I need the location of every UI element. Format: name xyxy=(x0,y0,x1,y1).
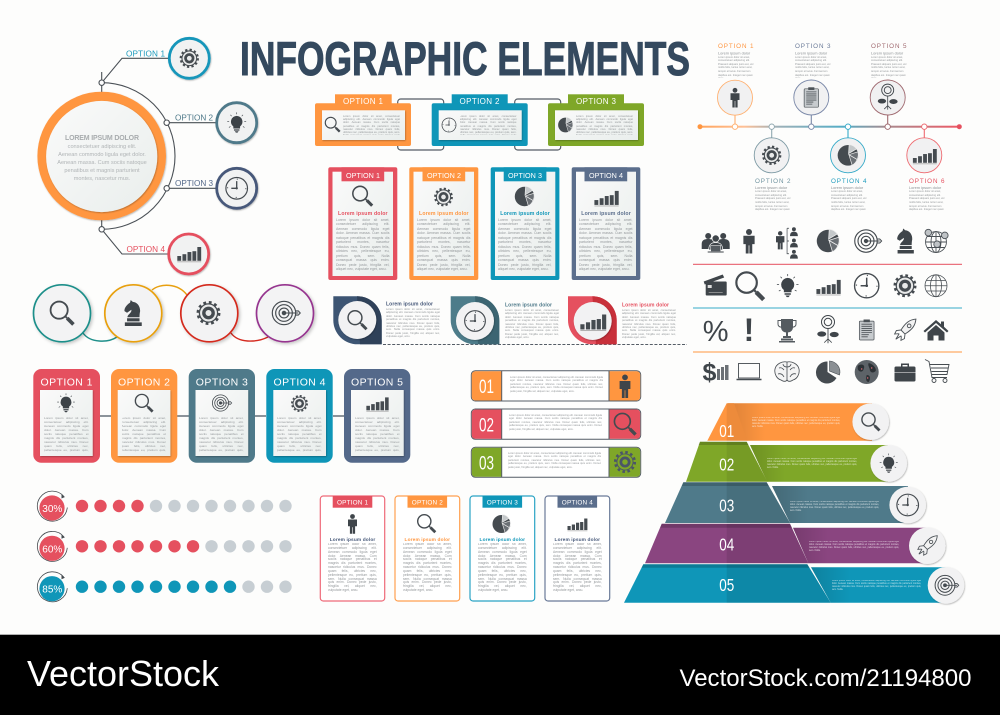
box option 2: OPTION 2 xyxy=(460,97,500,106)
process option 1: OPTION 1 xyxy=(40,376,93,388)
card option 1: Lorem ipsum dolor sit amet, consectetuer adipiscing elit. Aenean commodo ligula eget dolor. Aenean massa. Cum sociis natoque penatibus et magnis dis parturient montes, nascetur ridiculus mus. Donec quam felis, ultricies nec, pellentesque eu, pretium quis, sem. Nulla consequat massa quis enim. Donec pede justo, fringilla vel, aliquet nec, vulputate eget, arcu. xyxy=(336,218,390,271)
box option 1 xyxy=(315,94,411,146)
layer 02: 02 xyxy=(719,454,734,474)
step 3: OPTION 3 xyxy=(795,43,831,50)
card option 4 xyxy=(572,167,640,280)
note 1: Lorem ipsum dolor sit amet, consectetuer adipiscing elit. Aenean commodo ligula eget dolor. Aenean massa. Cum sociis natoque penatibus et magnis dis parturient montes, nascetur ridiculus mus. Donec quam felis, ultricies nec, pellentesque eu, pretium quis, sem. Nulla consequat massa quis enim. Donec pede justo, fringilla vel, aliquet nec, vulputate eget, arcu. xyxy=(386,308,440,338)
option 2: OPTION 2 xyxy=(175,114,213,122)
connector outlines xyxy=(398,99,561,150)
bar 02 xyxy=(471,409,641,439)
note 3: Lorem ipsum dolor sit amet, consectetuer adipiscing elit. Aenean commodo ligula eget dolor. Aenean massa. Cum sociis natoque penatibus et magnis dis parturient montes, nascetur ridiculus mus. Donec quam felis, ultricies nec, pellentesque eu, pretium quis, sem. Nulla consequat massa quis enim. Donec pede justo, fringilla vel, aliquet nec, vulputate eget, arcu. xyxy=(622,309,676,339)
step 6: OPTION 6 xyxy=(909,178,945,185)
progress 60% xyxy=(37,531,292,561)
icon row 3: % xyxy=(703,316,729,348)
card option 3 xyxy=(491,167,559,280)
circle: knight xyxy=(105,285,162,342)
step 4: OPTION 4 xyxy=(831,178,867,185)
progress 85%: 85% xyxy=(42,585,62,596)
dividers xyxy=(693,264,962,352)
layer 01: 01 xyxy=(719,421,734,441)
step 3: Lorem ipsum dolor xyxy=(795,50,828,55)
option 2 xyxy=(175,103,257,143)
outlined card 1 xyxy=(320,496,385,601)
card option 2 xyxy=(409,167,478,280)
layer 02 xyxy=(686,442,907,482)
layer 05: Lorem ipsum dolor sit amet, consectetuer adipiscing elit. Aenean commodo ligula eget dolor. Aenean massa. Cum sociis natoque penatibus et magnis dis parturient montes, nascetur ridiculus mus. Donec quam felis, ultricies nec, pellentesque eu, pretium quis, sem. Nulla. xyxy=(832,580,921,590)
outlined card 4: Lorem ipsum dolor xyxy=(555,537,600,543)
note 2: Lorem ipsum dolor sit amet, consectetuer adipiscing elit. Aenean commodo ligula eget dolor. Aenean massa. Cum sociis natoque penatibus et magnis dis parturient montes, nascetur ridiculus mus. Donec quam felis, ultricies nec, pellentesque eu, pretium quis, sem. Nulla consequat massa quis enim. Donec pede justo, fringilla vel, aliquet nec, vulputate eget, arcu. xyxy=(505,309,559,339)
process option 3: OPTION 3 xyxy=(196,376,248,388)
step 1 xyxy=(718,43,754,129)
step 4 xyxy=(830,124,867,212)
outlined card 4 xyxy=(545,496,610,601)
step 4: Lorem ipsum dolor xyxy=(831,185,864,190)
icon row 3: ! xyxy=(744,312,754,348)
process option 4 xyxy=(266,369,333,463)
timeline xyxy=(698,43,962,212)
horizontal option boxes xyxy=(315,94,644,150)
note 1: Lorem ipsum dolor xyxy=(386,302,433,308)
bar 02: Lorem ipsum dolor sit amet, consectetuer adipiscing elit. Aenean commodo ligula eget dolor. Aenean massa. Cum sociis natoque penatibus et magnis dis parturient montes, nascetur ridiculus mus. Donec quam felis, ultricies nec, pellentesque eu, pretium quis, sem. Nulla consequat massa quis enim. Donec pede justo, fringilla vel, aliquet nec, vulputate eget, arcu. xyxy=(509,414,602,431)
process option 1 xyxy=(33,369,100,463)
step 3 xyxy=(794,43,831,129)
card option 3: Lorem ipsum dolor xyxy=(500,211,550,217)
progress 60%: 60% xyxy=(42,544,62,555)
process option 3 xyxy=(189,369,255,463)
watermark band xyxy=(0,635,1000,715)
option 4: OPTION 4 xyxy=(126,245,165,254)
step 2: Lorem ipsum dolor xyxy=(755,185,788,190)
outlined card 4: OPTION 4 xyxy=(562,500,593,506)
central circle: LOREM IPSUM DOLOR xyxy=(65,135,139,142)
note 3: Lorem ipsum dolor xyxy=(622,302,669,308)
vertical option cards xyxy=(328,167,640,280)
note 1 xyxy=(333,296,440,344)
card option 2: OPTION 2 xyxy=(427,171,461,180)
title: INFOGRAPHIC ELEMENTS xyxy=(240,32,690,85)
central circle: montes, nascetur mus. xyxy=(74,176,131,182)
option 3: OPTION 3 xyxy=(175,179,213,188)
progress dots xyxy=(37,491,292,602)
layer 01 xyxy=(707,403,889,441)
box option 3 xyxy=(548,94,644,146)
outlined card 1: Lorem ipsum dolor sit amet, consectetuer adipiscing elit. Aenean commodo ligula eget dolor. Aenean massa. Cum sociis natoque penatibus et magnis dis parturient montes, nascetur ridiculus mus. Donec quam felis, ultricies nec, pellentesque eu, pretium quis, sem. Nulla consequat massa quis enim. Donec pede justo, fringilla vel, aliquet nec, vulputate eget, arcu. xyxy=(328,543,377,592)
progress 30%: 30% xyxy=(42,504,62,515)
connecting arcs xyxy=(83,285,268,341)
step 1: OPTION 1 xyxy=(718,43,754,50)
timeline axis xyxy=(698,124,962,129)
card option 2: Lorem ipsum dolor xyxy=(419,211,469,217)
circle: search xyxy=(34,285,90,342)
process option 2: OPTION 2 xyxy=(118,376,170,388)
central circle: Aenean commodo ligula eget dolor. xyxy=(58,152,146,158)
outlined card 3: OPTION 3 xyxy=(487,500,518,506)
layer 03: 03 xyxy=(719,496,734,516)
icon set xyxy=(693,227,962,386)
watermark logo text: VectorStock xyxy=(27,653,220,694)
card option 3: OPTION 3 xyxy=(508,171,542,180)
note 2 xyxy=(451,296,559,344)
outlined option cards xyxy=(320,496,610,601)
process option 2 xyxy=(111,369,177,463)
central circle xyxy=(37,92,166,220)
layer 05 xyxy=(624,564,964,604)
bar 03: 03 xyxy=(479,454,494,474)
outlined card 3: Lorem ipsum dolor sit amet, consectetuer adipiscing elit. Aenean commodo ligula eget dolor. Aenean massa. Cum sociis natoque penatibus et magnis dis parturient montes, nascetur ridiculus mus. Donec quam felis, ultricies nec, pellentesque eu, pretium quis, sem. Nulla consequat massa quis enim. Donec pede justo, fringilla vel, aliquet nec, vulputate eget, arcu. xyxy=(478,543,527,592)
numbered bars xyxy=(471,371,641,478)
card option 1: Lorem ipsum dolor xyxy=(338,211,388,217)
card option 2: Lorem ipsum dolor sit amet, consectetuer adipiscing elit. Aenean commodo ligula eget dolor. Aenean massa. Cum sociis natoque penatibus et magnis dis parturient montes, nascetur ridiculus mus. Donec quam felis, ultricies nec, pellentesque eu, pretium quis, sem. Nulla consequat massa quis enim. Donec pede justo, fringilla vel, aliquet nec, vulputate eget, arcu. xyxy=(417,218,470,271)
icon row 4 xyxy=(703,358,949,386)
layer 05: 05 xyxy=(719,575,734,595)
dashed baseline xyxy=(383,344,687,346)
option 1: OPTION 1 xyxy=(126,50,165,58)
icon row 3 xyxy=(703,312,948,348)
process option 5: OPTION 5 xyxy=(351,376,403,388)
bar 02: 02 xyxy=(479,416,494,436)
bar 03: Lorem ipsum dolor sit amet, consectetuer adipiscing elit. Aenean commodo ligula eget dolor. Aenean massa. Cum sociis natoque penatibus et magnis dis parturient montes, nascetur ridiculus mus. Donec quam felis, ultricies nec, pellentesque eu, pretium quis, sem. Nulla consequat massa quis enim. Donec pede justo, fringilla vel, aliquet nec, vulputate eget, arcu. xyxy=(508,452,601,469)
box option 1: OPTION 1 xyxy=(343,97,384,106)
linked circle row xyxy=(34,285,314,342)
step 2: OPTION 2 xyxy=(755,178,791,185)
layer 04: 04 xyxy=(719,534,734,554)
outlined card 2 xyxy=(395,496,460,601)
drop shape notes xyxy=(333,296,687,344)
outlined card 3: Lorem ipsum dolor xyxy=(480,537,525,543)
option 4 xyxy=(126,234,209,274)
process option 4: OPTION 4 xyxy=(274,376,326,388)
bar 03 xyxy=(471,447,641,478)
central circle: consectetuer adipiscing elit. xyxy=(68,144,137,150)
process option 5 xyxy=(344,369,410,463)
progress 85% xyxy=(37,572,292,602)
outlined card 1: OPTION 1 xyxy=(337,500,368,506)
box option 3: OPTION 3 xyxy=(576,97,617,106)
card option 1: OPTION 1 xyxy=(346,171,380,180)
step 5: OPTION 5 xyxy=(871,43,907,50)
layer 04 xyxy=(645,524,946,564)
layer 01: Lorem ipsum dolor sit amet, consectetuer adipiscing elit. Aenean commodo ligula eget dolor. Aenean massa. Cum sociis natoque penatibus et magnis dis parturient montes, nascetur ridiculus mus. Donec quam felis, ultricies nec, pellentesque eu, pretium quis, sem. Nulla. xyxy=(752,417,840,428)
layer 04: Lorem ipsum dolor sit amet, consectetuer adipiscing elit. Aenean commodo ligula eget dolor. Aenean massa. Cum sociis natoque penatibus et magnis dis parturient montes, nascetur ridiculus mus. Donec quam felis, ultricies nec, pellentesque eu, pretium quis, sem. Nulla. xyxy=(809,540,899,552)
central circle: Aenean massa. Cum sociis natoque xyxy=(57,160,147,166)
card option 4: Lorem ipsum dolor sit amet, consectetuer adipiscing elit. Aenean commodo ligula eget dolor. Aenean massa. Cum sociis natoque penatibus et magnis dis parturient montes, nascetur ridiculus mus. Donec quam felis, ultricies nec, pellentesque eu, pretium quis, sem. Nulla consequat massa quis enim. Donec pede justo, fringilla vel, aliquet nec, vulputate eget, arcu. xyxy=(579,218,632,271)
card option 3: Lorem ipsum dolor sit amet, consectetuer adipiscing elit. Aenean commodo ligula eget dolor. Aenean massa. Cum sociis natoque penatibus et magnis dis parturient montes, nascetur ridiculus mus. Donec quam felis, ultricies nec, pellentesque eu, pretium quis, sem. Nulla consequat massa quis enim. Donec pede justo, fringilla vel, aliquet nec, vulputate eget, arcu. xyxy=(498,218,552,271)
outlined card 2: Lorem ipsum dolor xyxy=(405,537,450,543)
layer 02: Lorem ipsum dolor sit amet, consectetuer adipiscing elit. Aenean commodo ligula eget dolor. Aenean massa. Cum sociis natoque penatibus et magnis dis parturient montes, nascetur ridiculus mus. Donec quam felis, ultricies nec, pellentesque eu, pretium quis, sem. Nulla. xyxy=(767,458,857,468)
layer 03: Lorem ipsum dolor sit amet, consectetuer adipiscing elit. Aenean commodo ligula eget dolor. Aenean massa. Cum sociis natoque penatibus et magnis dis parturient montes, nascetur ridiculus mus. Donec quam felis, ultricies nec, pellentesque eu, pretium quis, sem. Nulla. xyxy=(790,501,879,512)
circle: target xyxy=(256,285,314,342)
icon row 2 xyxy=(704,272,947,300)
note 3 xyxy=(568,296,676,344)
bar 01: 01 xyxy=(479,377,494,398)
progress 30% xyxy=(37,491,292,521)
watermark url text: VectorStock.com/21194800 xyxy=(680,665,972,692)
step 5: Lorem ipsum dolor xyxy=(871,50,904,55)
card option 1 xyxy=(328,167,397,280)
step 2 xyxy=(754,124,791,212)
bar 01 xyxy=(471,371,641,401)
card option 4: OPTION 4 xyxy=(589,171,623,180)
outlined card 4: Lorem ipsum dolor sit amet, consectetuer adipiscing elit. Aenean commodo ligula eget dolor. Aenean massa. Cum sociis natoque penatibus et magnis dis parturient montes, nascetur ridiculus mus. Donec quam felis, ultricies nec, pellentesque eu, pretium quis, sem. Nulla consequat massa quis enim. Donec pede justo, fringilla vel, aliquet nec, vulputate eget, arcu. xyxy=(553,543,602,592)
pyramid xyxy=(624,403,964,604)
step 1: Lorem ipsum dolor xyxy=(718,50,751,55)
outlined card 3 xyxy=(470,496,535,601)
option 3 xyxy=(175,168,257,208)
process option boxes xyxy=(33,369,410,463)
bar 01: Lorem ipsum dolor sit amet, consectetuer adipiscing elit. Aenean commodo ligula eget dolor. Aenean massa. Cum sociis natoque penatibus et magnis dis parturient montes, nascetur ridiculus mus. Donec quam felis, ultricies nec, pellentesque eu, pretium quis, sem. Nulla consequat massa quis enim. Donec pede justo, fringilla vel, aliquet nec, vulputate eget, arcu. xyxy=(510,376,603,393)
radial option diagram xyxy=(37,38,257,274)
outlined card 2: Lorem ipsum dolor sit amet, consectetuer adipiscing elit. Aenean commodo ligula eget dolor. Aenean massa. Cum sociis natoque penatibus et magnis dis parturient montes, nascetur ridiculus mus. Donec quam felis, ultricies nec, pellentesque eu, pretium quis, sem. Nulla consequat massa quis enim. Donec pede justo, fringilla vel, aliquet nec, vulputate eget, arcu. xyxy=(403,543,452,592)
circle: gear xyxy=(181,285,238,342)
card option 4: Lorem ipsum dolor xyxy=(581,211,631,217)
step 6: Lorem ipsum dolor xyxy=(909,185,942,190)
outlined card 1: Lorem ipsum dolor xyxy=(330,537,375,543)
connector lines xyxy=(99,58,218,254)
option 1 xyxy=(126,38,209,78)
icon row 1 xyxy=(702,227,948,259)
connectors xyxy=(100,415,344,417)
box option 2 xyxy=(432,94,528,146)
step 5 xyxy=(870,43,907,129)
note 2: Lorem ipsum dolor xyxy=(505,302,552,308)
step 6 xyxy=(907,124,945,212)
central circle: penatibus et magnis parturient xyxy=(64,168,140,174)
outlined card 2: OPTION 2 xyxy=(412,500,443,506)
layer 03 xyxy=(665,482,926,523)
